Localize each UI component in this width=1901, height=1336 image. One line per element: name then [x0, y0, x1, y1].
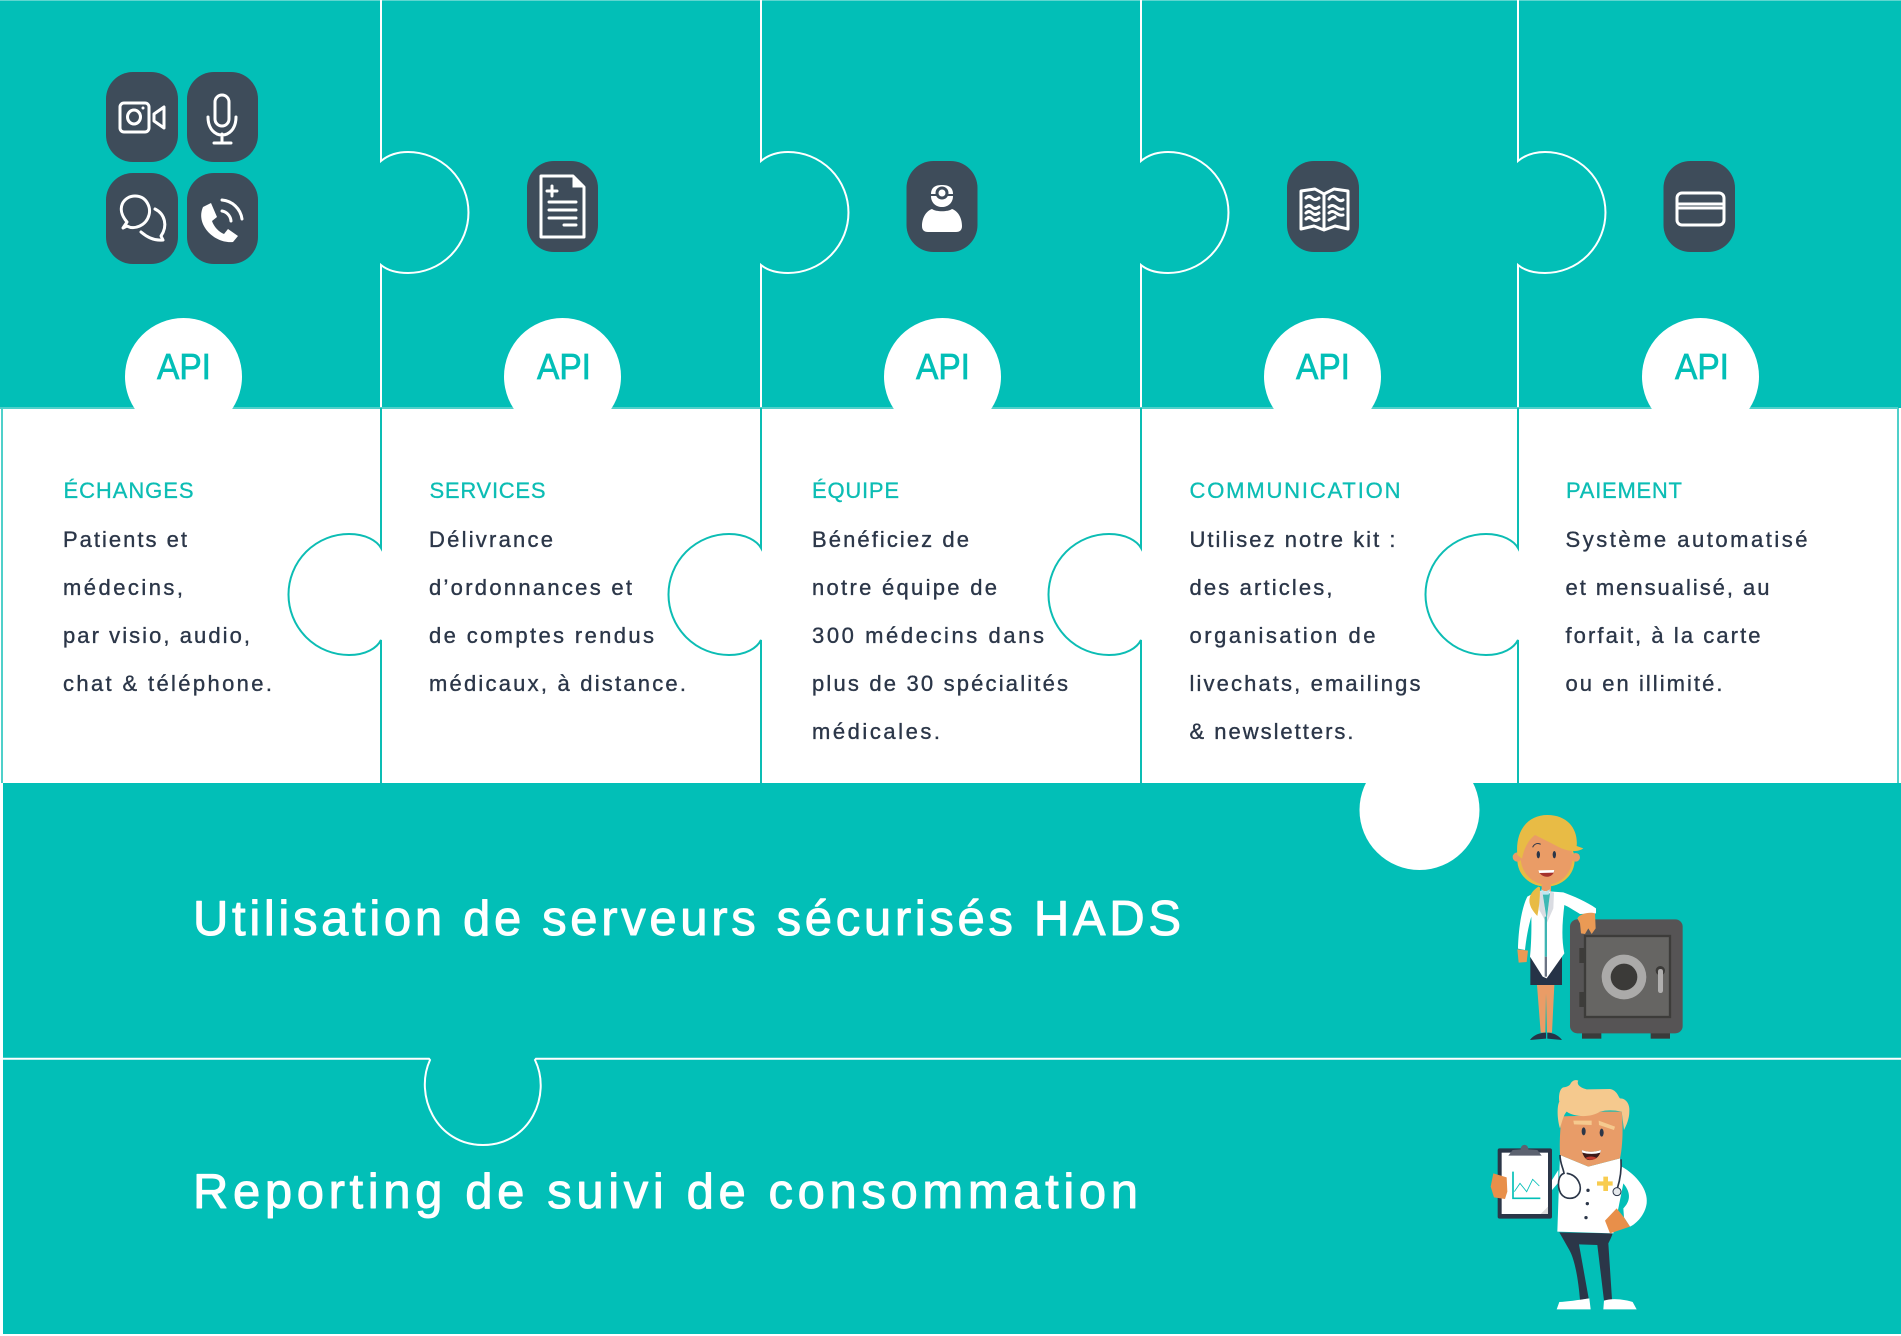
icon: doctor — [906, 161, 978, 252]
text block: communication: livechats, emailings — [1190, 671, 1420, 696]
text block: équipe: 300 médecins dans — [812, 623, 1044, 648]
API tab — [1264, 318, 1381, 435]
text block: communication: COMMUNICATION — [1190, 478, 1400, 503]
title: reporting: Reporting de suivi de consommation — [193, 1165, 1138, 1219]
panel: équipe — [812, 0, 1228, 783]
text block: services — [429, 478, 686, 696]
icon: chat bubbles — [106, 173, 178, 264]
icon: video camera — [106, 72, 178, 162]
text block: paiement — [1566, 478, 1808, 696]
text block: équipe: médicales. — [812, 719, 940, 744]
icon: open book — [1287, 161, 1359, 252]
API tab: API — [1296, 346, 1350, 387]
API tab — [504, 318, 621, 435]
text block: paiement: ou en illimité. — [1566, 671, 1722, 696]
text block: échanges: par visio, audio, — [63, 623, 250, 648]
API tab: API — [537, 346, 591, 387]
text block: équipe: Bénéficiez de — [812, 527, 969, 552]
text block: services: d’ordonnances et — [429, 575, 632, 600]
text block: services: Délivrance — [429, 527, 553, 552]
text block: paiement: et mensualisé, au — [1566, 575, 1770, 600]
API tab: API — [1675, 346, 1729, 387]
text block: équipe: notre équipe de — [812, 575, 997, 600]
icon: microphone — [187, 72, 258, 162]
text block: échanges: chat & téléphone. — [63, 671, 272, 696]
text block: paiement: Système automatisé — [1566, 527, 1808, 552]
text block: échanges — [63, 478, 272, 696]
text block: services: SERVICES — [430, 478, 546, 503]
panel: services — [429, 0, 848, 783]
text block: communication — [1190, 478, 1420, 744]
text block: services: médicaux, à distance. — [429, 671, 686, 696]
icon: document — [527, 161, 598, 252]
illustration: male doctor with clipboard — [1491, 1080, 1647, 1309]
panel: communication — [1190, 0, 1605, 783]
puzzle knob: white circle — [1360, 750, 1480, 870]
text block: équipe: ÉQUIPE — [812, 478, 899, 503]
API tab — [125, 318, 242, 435]
text block: communication: des articles, — [1190, 575, 1332, 600]
icon: bank card — [1664, 161, 1735, 252]
text block: paiement: forfait, à la carte — [1566, 623, 1760, 648]
panel: échanges — [63, 0, 468, 783]
text block: communication: Utilisez notre kit : — [1190, 527, 1396, 552]
text block: échanges: ÉCHANGES — [64, 478, 194, 503]
text block: échanges: médecins, — [63, 575, 183, 600]
icon: telephone — [187, 173, 258, 264]
text block: services: de comptes rendus — [429, 623, 654, 648]
API tab: API — [157, 346, 211, 387]
panel: paiement — [1566, 161, 1808, 696]
API tab: API — [916, 346, 970, 387]
divider with puzzle knob — [3, 1059, 1901, 1145]
text block: communication: & newsletters. — [1190, 719, 1354, 744]
API tab — [1642, 318, 1759, 435]
illustration: woman doctor with safe — [1513, 815, 1683, 1040]
text block: paiement: PAIEMENT — [1566, 478, 1682, 503]
API tab — [884, 318, 1001, 435]
text block: équipe — [812, 478, 1068, 744]
text block: équipe: plus de 30 spécialités — [812, 671, 1068, 696]
title: serveurs HADS: Utilisation de serveurs sécurisés HADS — [193, 892, 1181, 946]
text block: échanges: Patients et — [63, 527, 187, 552]
text block: communication: organisation de — [1190, 623, 1376, 648]
